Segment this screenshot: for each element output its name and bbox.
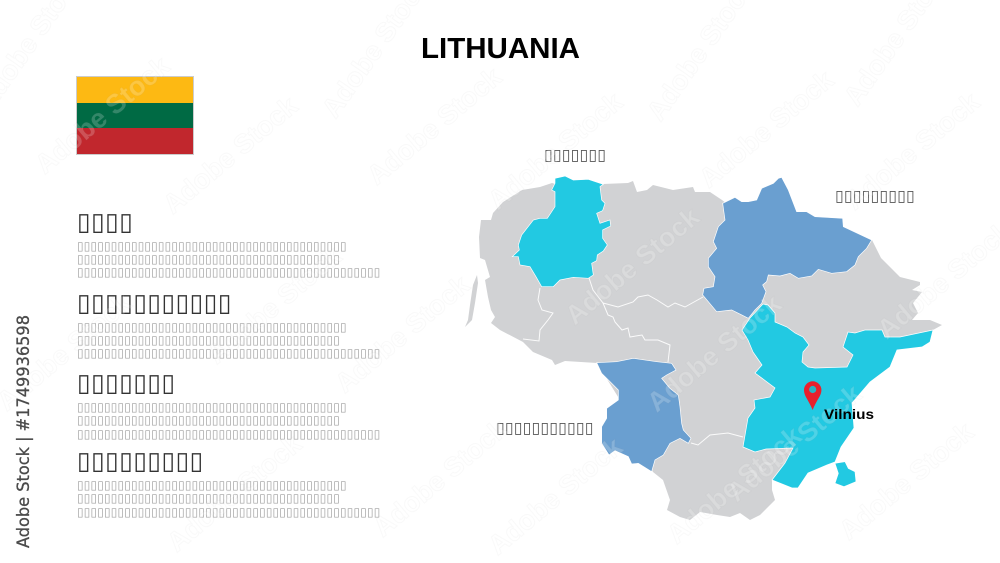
- flag of Lithuania: [76, 76, 194, 155]
- text block 4: ▯▯▯▯▯▯▯▯▯▯▯▯▯▯▯▯▯▯▯▯▯▯▯▯▯▯▯▯▯▯▯▯▯▯▯▯▯▯▯▯▯▯▯▯▯: [77, 505, 380, 519]
- text block 4: [77, 478, 380, 519]
- watermark layer: Adobe Stock: [482, 86, 629, 216]
- region: north-east blue: [703, 177, 872, 318]
- watermark layer: Adobe Stock: [201, 240, 348, 370]
- side credit text: Adobe Stock | #1749936598: [14, 315, 34, 548]
- text block 3: ▯▯▯▯▯▯▯▯▯▯▯▯▯▯▯▯▯▯▯▯▯▯▯▯▯▯▯▯▯▯▯▯▯▯▯▯▯▯▯▯▯▯▯▯▯: [77, 427, 380, 441]
- watermark layer: Adobe Stock: [833, 416, 980, 546]
- region: north-west cyan: [512, 176, 611, 287]
- region: Curonian spit: [465, 275, 478, 327]
- region: south-east cyan with Vilnius: [742, 304, 933, 488]
- text block 3: ▯▯▯▯▯▯▯▯▯▯▯▯▯▯▯▯▯▯▯▯▯▯▯▯▯▯▯▯▯▯▯▯▯▯▯▯▯▯▯▯: [77, 400, 347, 414]
- label: north-west region: ▯▯▯▯▯▯▯: [544, 146, 606, 164]
- heading 4: ▯▯▯▯▯▯▯▯▯: [77, 446, 204, 475]
- label: north-east region: ▯▯▯▯▯▯▯▯▯: [835, 187, 915, 205]
- text block 3: ▯▯▯▯▯▯▯▯▯▯▯▯▯▯▯▯▯▯▯▯▯▯▯▯▯▯▯▯▯▯▯▯▯▯▯▯▯▯▯: [77, 413, 340, 427]
- text block 4: ▯▯▯▯▯▯▯▯▯▯▯▯▯▯▯▯▯▯▯▯▯▯▯▯▯▯▯▯▯▯▯▯▯▯▯▯▯▯▯▯: [77, 478, 347, 492]
- heading 3: ▯▯▯▯▯▯▯: [77, 368, 176, 397]
- text block 2: ▯▯▯▯▯▯▯▯▯▯▯▯▯▯▯▯▯▯▯▯▯▯▯▯▯▯▯▯▯▯▯▯▯▯▯▯▯▯▯▯: [77, 320, 347, 334]
- watermark layer: Adobe Stock: [693, 64, 840, 194]
- text block 1: ▯▯▯▯▯▯▯▯▯▯▯▯▯▯▯▯▯▯▯▯▯▯▯▯▯▯▯▯▯▯▯▯▯▯▯▯▯▯▯▯▯▯▯▯▯: [77, 265, 380, 279]
- watermark layer: Adobe Stock: [329, 269, 476, 399]
- region: small cyan exclave: [835, 462, 856, 487]
- watermark layer: Adobe Stock: [161, 428, 308, 558]
- watermark layer: Adobe Stock: [29, 50, 176, 180]
- watermark layer: Adobe Stock: [482, 431, 629, 561]
- watermark layer: Adobe Stock: [367, 413, 514, 543]
- title: LITHUANIA: [421, 33, 580, 65]
- text block 4: ▯▯▯▯▯▯▯▯▯▯▯▯▯▯▯▯▯▯▯▯▯▯▯▯▯▯▯▯▯▯▯▯▯▯▯▯▯▯▯: [77, 491, 340, 505]
- watermark layer: Adobe Stock: [839, 86, 986, 216]
- region: south-west blue: [597, 358, 691, 472]
- watermark layer: Adobe Stock: [559, 201, 706, 331]
- text block 1: ▯▯▯▯▯▯▯▯▯▯▯▯▯▯▯▯▯▯▯▯▯▯▯▯▯▯▯▯▯▯▯▯▯▯▯▯▯▯▯: [77, 252, 340, 266]
- watermark layer: Adobe Stock: [661, 420, 808, 550]
- watermark layer: Adobe Stock: [157, 90, 304, 220]
- label: south-west region: ▯▯▯▯▯▯▯▯▯▯▯: [496, 419, 594, 437]
- watermark layer: Adobe Stock: [721, 378, 868, 508]
- internal borders: [523, 278, 743, 445]
- text block 1: [77, 238, 380, 279]
- text block 1: ▯▯▯▯▯▯▯▯▯▯▯▯▯▯▯▯▯▯▯▯▯▯▯▯▯▯▯▯▯▯▯▯▯▯▯▯▯▯▯▯: [77, 238, 347, 252]
- watermark layer: Adobe Stock: [641, 288, 788, 418]
- text block 2: [77, 320, 380, 360]
- text block 3: [77, 400, 380, 441]
- label: Vilnius: Vilnius: [824, 406, 874, 422]
- heading 2: ▯▯▯▯▯▯▯▯▯▯▯: [77, 288, 232, 317]
- text block 2: ▯▯▯▯▯▯▯▯▯▯▯▯▯▯▯▯▯▯▯▯▯▯▯▯▯▯▯▯▯▯▯▯▯▯▯▯▯▯▯: [77, 333, 340, 347]
- text block 2: ▯▯▯▯▯▯▯▯▯▯▯▯▯▯▯▯▯▯▯▯▯▯▯▯▯▯▯▯▯▯▯▯▯▯▯▯▯▯▯▯▯▯▯▯▯: [77, 346, 380, 360]
- region: grey base of the country: [479, 181, 942, 520]
- watermark layer: Adobe Stock: [361, 61, 508, 191]
- heading 1: ▯▯▯▯: [77, 207, 133, 236]
